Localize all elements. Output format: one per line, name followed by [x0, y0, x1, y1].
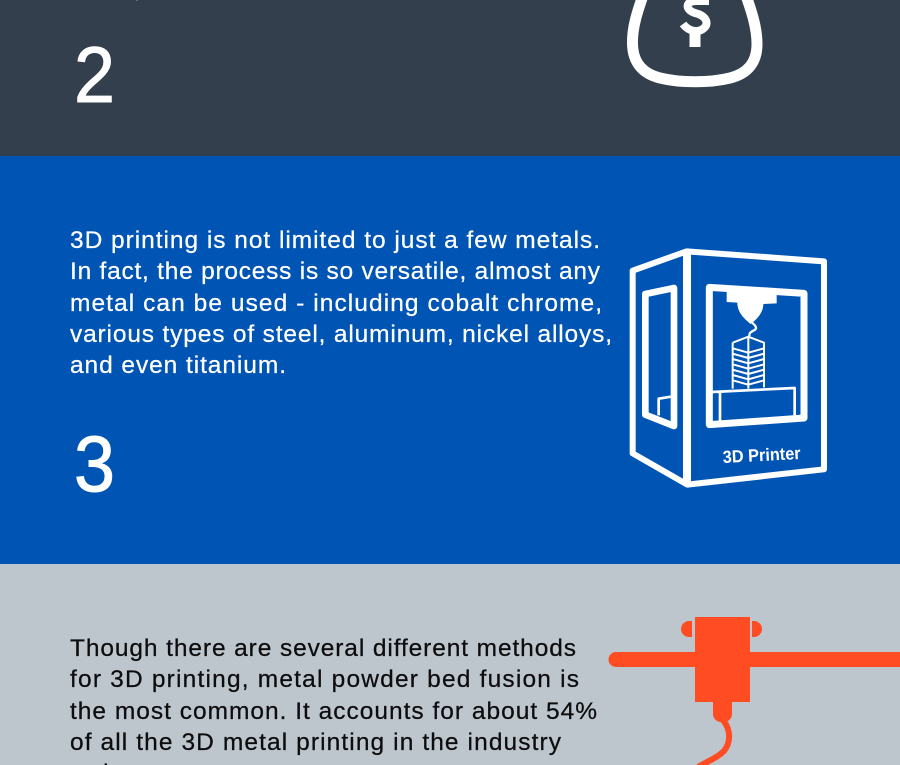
panel: fact 4	[0, 564, 900, 765]
number 2: 2	[74, 30, 115, 119]
panel: fact 2	[0, 0, 900, 156]
text block: metals: metal can be used - including cobalt chrome,	[70, 290, 602, 317]
number 3: 3	[74, 419, 115, 508]
rail	[609, 652, 900, 667]
extruder head	[727, 291, 777, 324]
icon: orange extruder	[609, 617, 900, 765]
text block: metals: In fact, the process is so versatile, almost any	[70, 258, 601, 285]
text block: metals: and even titanium.	[70, 352, 286, 379]
right ear	[752, 621, 762, 637]
text block: metals: 3D printing is not limited to just a few metals.	[70, 227, 600, 254]
text block: powder bed fusion: Though there are several different methods	[70, 635, 576, 662]
icon: 3D printer	[633, 251, 824, 485]
side window	[645, 288, 674, 426]
printed building	[733, 337, 764, 389]
text block: metals	[70, 227, 612, 379]
printer body	[633, 251, 824, 485]
text block: powder bed fusion	[70, 635, 597, 765]
text block: powder bed fusion: the most common. It accounts for about 54%	[70, 698, 597, 725]
left ear	[681, 621, 692, 637]
text block: powder bed fusion: of all the 3D metal printing in the industry	[70, 729, 562, 756]
panel: fact 3	[0, 156, 900, 564]
filament	[749, 323, 756, 336]
head block	[695, 617, 750, 702]
print bed	[712, 388, 795, 421]
front window	[709, 287, 804, 425]
printer label: 3D Printer	[722, 443, 801, 467]
nozzle	[713, 702, 732, 722]
text block: metals: various types of steel, aluminum, nickel alloys,	[70, 321, 612, 348]
icon: money bag	[632, 0, 757, 82]
cable	[698, 720, 729, 765]
text block: powder bed fusion: for 3D printing, metal powder bed fusion is	[70, 666, 579, 693]
